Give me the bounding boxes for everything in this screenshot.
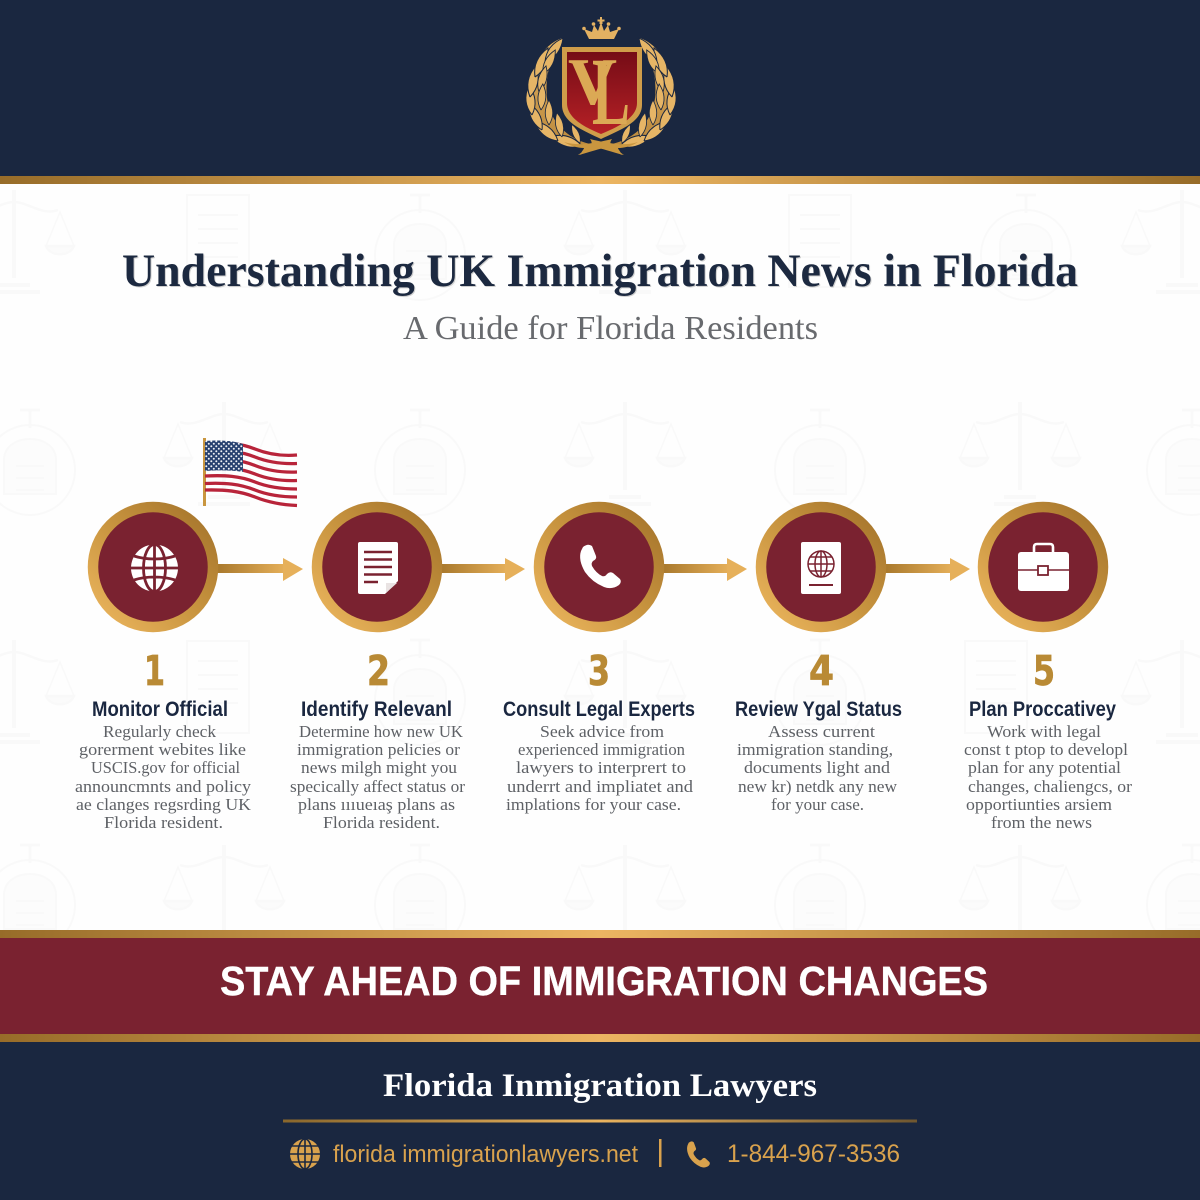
monogram V L (568, 38, 630, 145)
number 5: 5 (1033, 647, 1055, 695)
icon: laurel wreath (524, 35, 678, 155)
step description: Determine how new UK (299, 722, 464, 741)
step description: Seek advice from (540, 722, 664, 741)
step description (964, 722, 1132, 832)
website: florida immigrationlawyers.net (333, 1141, 638, 1168)
step title: Consult Legal Experts (503, 698, 695, 721)
step description: Work with legal (987, 722, 1101, 741)
arrow: step 2 to 3 (440, 558, 525, 581)
firm name: Florida Inmigration Lawyers (383, 1068, 817, 1104)
step 4: review legal status (735, 507, 902, 814)
icon: document in gold ring (317, 507, 437, 627)
step description: news milgh might you (301, 758, 458, 777)
step description: plan for any potential (968, 758, 1121, 777)
step title: Review Ygal Status (735, 698, 902, 721)
number 4: 4 (809, 647, 834, 695)
monogram V L: V (568, 45, 617, 119)
icon: phone in gold ring (539, 507, 659, 627)
step description: experienced immigration (518, 740, 685, 759)
call-to-action banner (0, 930, 1200, 1042)
number 3: 3 (588, 647, 610, 695)
arrow: step 1 to 2 (216, 558, 303, 581)
logo: crest with crown, wreath and shield (524, 17, 678, 155)
number 2: 2 (367, 647, 390, 695)
icon: passport in gold ring (761, 507, 881, 627)
title: Understanding UK Immigration News in Florida (122, 245, 1078, 297)
step description: Assess current (768, 722, 875, 741)
step description: gorerment webites like (79, 740, 246, 759)
background watermark pattern (0, 190, 1200, 950)
number 1: 1 (144, 647, 165, 695)
step description (290, 722, 465, 832)
step title: Monitor Official (92, 698, 228, 721)
step description: documents light and (744, 758, 891, 777)
step description: ae clanges regsrding UK (76, 795, 252, 814)
monogram V L: L (592, 38, 630, 145)
step description (737, 722, 898, 814)
step description: Florida resident. (104, 813, 223, 832)
step description: Florida resident. (323, 813, 440, 832)
step description: implations for your case. (506, 795, 681, 814)
step description: from the news (991, 813, 1092, 832)
step 3: consult legal experts (503, 507, 695, 814)
step description: immigration pelicies or (297, 740, 460, 759)
icon: American flag on pole (203, 438, 297, 506)
arrow: step 3 to 4 (662, 558, 747, 581)
header band (0, 0, 1200, 184)
step description: immigration standing, (737, 740, 893, 759)
step description: plans ıııueıaş plans as (298, 795, 455, 814)
step description: lawyers to interprert to (516, 758, 686, 777)
step description: new kr) netdk any new (738, 777, 898, 796)
step description: const t ptop to developl (964, 740, 1128, 759)
step 5: plan proactively (964, 507, 1132, 832)
icon: footer globe (290, 1139, 320, 1169)
step description (506, 722, 694, 814)
footer band (0, 1042, 1200, 1200)
icon: crown (582, 17, 621, 39)
step description: for your case. (771, 795, 864, 814)
icon: shield (562, 47, 642, 139)
step 2: identify relevant (290, 507, 465, 832)
icon: footer phone (687, 1141, 710, 1167)
step description: opportiunties arsiem (966, 795, 1112, 814)
subtitle: A Guide for Florida Residents (403, 310, 818, 347)
step description: underrt and impliatet and (507, 777, 694, 796)
step title: Plan Proccativey (969, 698, 1116, 721)
step 1: monitor official (75, 507, 252, 832)
step title: Identify Relevanl (301, 698, 452, 721)
arrow: step 4 to 5 (884, 558, 970, 581)
step description: USCIS.gov for official (91, 758, 240, 777)
step description: Regularly check (103, 722, 216, 741)
step description: specically affect status or (290, 777, 465, 796)
step description (75, 722, 252, 832)
step description: announcmnts and policy (75, 777, 252, 796)
icon: globe in gold ring (93, 507, 213, 627)
step description: changes, chaliengcs, or (968, 777, 1132, 796)
icon: briefcase in gold ring (983, 507, 1103, 627)
banner text: STAY AHEAD OF IMMIGRATION CHANGES (220, 958, 988, 1004)
phone number: 1-844-967-3536 (727, 1140, 900, 1168)
